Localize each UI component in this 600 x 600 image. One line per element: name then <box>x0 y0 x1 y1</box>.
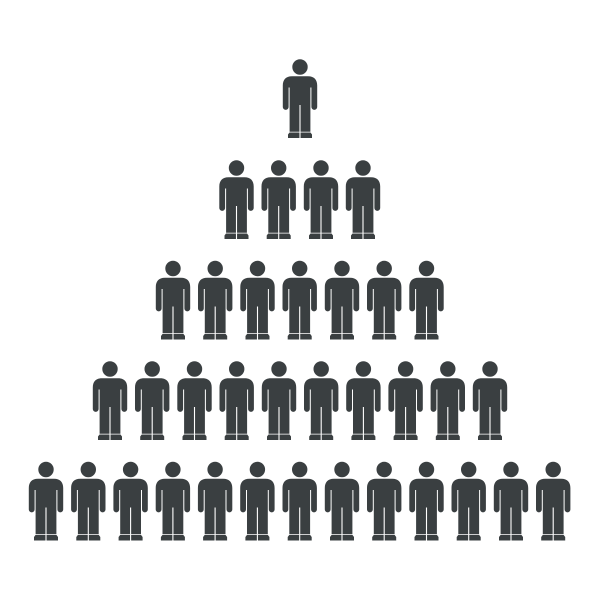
row 2: four people <box>219 160 380 239</box>
row 5: thirteen people at the base <box>29 462 570 540</box>
row 3: seven people <box>156 261 444 340</box>
row 4: ten people <box>93 361 507 440</box>
row 1: single person at the top <box>283 59 317 138</box>
